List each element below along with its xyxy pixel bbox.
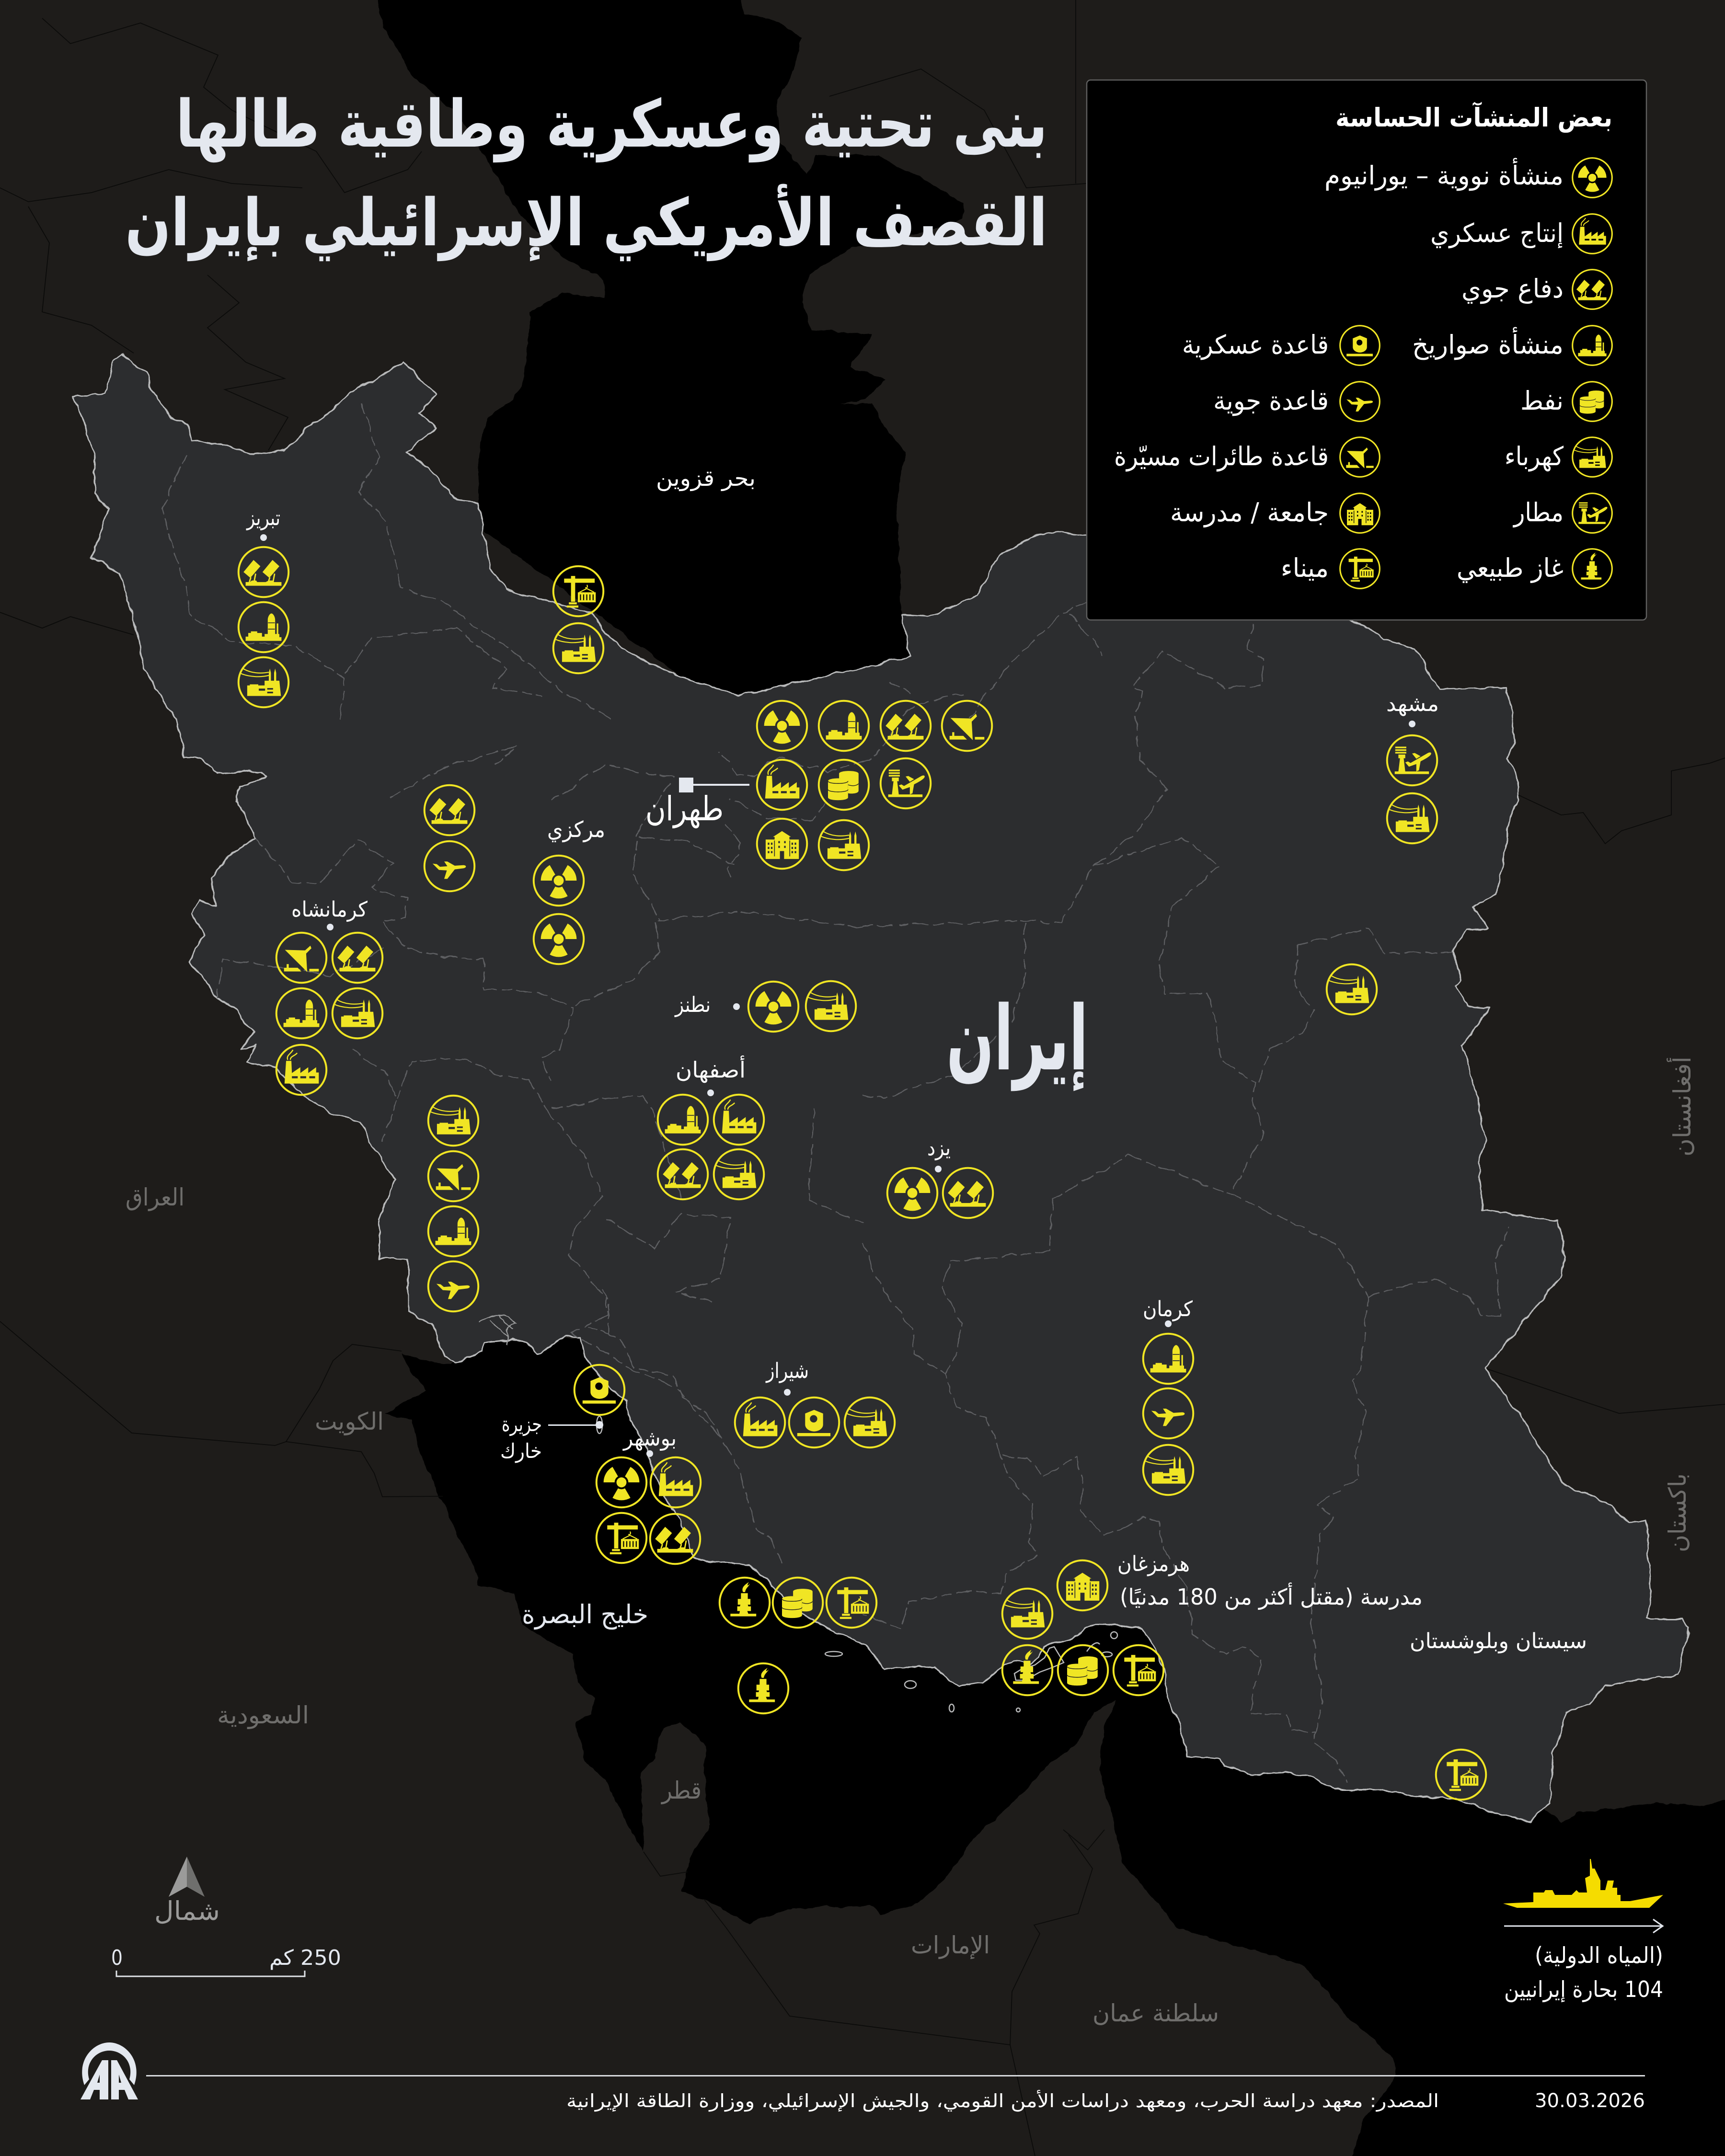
footer rule [146, 2075, 1645, 2076]
labels: neighbouring countries: باكستان [1664, 1473, 1691, 1552]
legend column: right: نفط [1520, 386, 1564, 416]
cluster: Khuzestan [428, 1096, 478, 1311]
legend column: right: دفاع جوي [1461, 274, 1564, 304]
label: Gulf of Basra: خليج البصرة [522, 1599, 648, 1630]
map: province boundaries [161, 403, 1509, 1783]
cluster: Shiraz: شيراز [765, 1359, 809, 1383]
icon: warship [1503, 1859, 1663, 1908]
legend column: right: غاز طبيعي [1457, 553, 1564, 583]
cluster: Tehran [645, 701, 992, 870]
labels: neighbouring countries: أفغانستان [1667, 1056, 1696, 1157]
legend column: left: قاعدة طائرات مسيّرة [1114, 441, 1329, 471]
legend column: left: ميناء [1281, 553, 1329, 583]
cluster: Caspian coast [553, 566, 603, 673]
legend column: left: قاعدة عسكرية [1182, 330, 1329, 360]
cluster: Tabriz [239, 506, 288, 707]
legend column: left [1114, 326, 1380, 588]
cluster: Hormozgan: مدرسة (مقتل أكثر من 180 مدنيًا) [1120, 1583, 1423, 1610]
cluster: Kerman: كرمان [1143, 1297, 1193, 1321]
scale bar: 0 [111, 1946, 123, 1970]
cluster: Bushehr [597, 1426, 701, 1564]
legend column: right: منشأة نووية – يورانيوم [1324, 158, 1564, 191]
cluster: Hormozgan [1002, 1552, 1423, 1695]
cluster: Yazd: يزد [927, 1136, 951, 1160]
legend column: right [1324, 158, 1612, 588]
cluster: Tehran: طهران [645, 789, 724, 828]
map: Caspian Sea [369, 0, 963, 719]
map: Persian Gulf and Gulf of Oman [385, 1332, 1725, 2156]
legend column: left: جامعة / مدرسة [1170, 497, 1329, 528]
labels: neighbouring countries: قطر [660, 1777, 702, 1804]
legend heading: بعض المنشآت الحساسة [1335, 102, 1612, 133]
map: Iran [74, 354, 1689, 1821]
label: international waters: (المياه الدولية) [1535, 1942, 1663, 1969]
labels: neighbouring countries: الإمارات [911, 1931, 990, 1959]
cluster: Bushehr: بوشهر [622, 1426, 677, 1451]
labels: neighbouring countries: السعودية [217, 1701, 309, 1729]
source text: المصدر: معهد دراسة الحرب، ومعهد دراسات الأمن القومي، والجيش الإسرائيلي، ووزارة الطاقة الإيرانية [566, 2089, 1439, 2112]
cluster: west of Markazi [425, 785, 474, 891]
cluster: Mashhad [1386, 692, 1439, 843]
labels: neighbouring countries: العراق [126, 1183, 184, 1211]
cluster: Natanz: نطنز [674, 993, 711, 1017]
legend column: right: مطار [1512, 497, 1564, 528]
cluster: Isfahan: أصفهان [676, 1055, 746, 1083]
cluster: Kermanshah: كرمانشاه [291, 897, 368, 922]
cluster: Yazd [887, 1136, 993, 1218]
scale bar [111, 1946, 341, 1976]
labels: neighbouring countries: سلطنة عمان [1092, 1999, 1219, 2027]
cluster: Sistan and Baluchestan: سيستان وبلوشستان [1410, 1629, 1587, 1653]
scale bar: 250 كم [269, 1946, 341, 1970]
map: islands [597, 1416, 1117, 1712]
cluster: Shiraz [735, 1359, 895, 1447]
cluster: Kerman [1143, 1297, 1193, 1495]
cluster: Natanz [674, 981, 856, 1032]
date: 30.03.2026 [1535, 2090, 1645, 2112]
legend column: right: كهرباء [1505, 441, 1564, 471]
cluster: Isfahan [658, 1055, 764, 1199]
cluster: Sistan and Baluchestan [1410, 1629, 1587, 1800]
cluster: Markazi [534, 816, 605, 964]
labels: neighbouring countries [126, 1056, 1696, 2027]
icon: north arrow [154, 1857, 220, 1926]
label: Caspian Sea: بحر قزوين [656, 465, 756, 492]
icon: electricity, South Khorasan [1327, 964, 1377, 1014]
title [125, 87, 1047, 262]
cluster: Hormozgan: هرمزغان [1117, 1552, 1190, 1576]
labels: neighbouring countries: الكويت [315, 1408, 384, 1435]
cluster: Kharg Island [500, 1365, 624, 1463]
label: international waters: 104 بحارة إيرانيين [1504, 1976, 1663, 2003]
cluster: Markazi: مركزي [547, 816, 605, 843]
label: international waters [1504, 1942, 1663, 2003]
legend column: right: منشأة صواريخ [1412, 327, 1564, 360]
cluster: Kharg Island: خارك [500, 1439, 542, 1463]
cluster: southern coast [720, 1578, 876, 1713]
cluster: Mashhad: مشهد [1386, 692, 1439, 716]
label: Iran: إيران [946, 986, 1088, 1091]
logo: AA [80, 2042, 138, 2099]
title: بنى تحتية وعسكرية وطاقية طالها [176, 87, 1047, 163]
legend column: right: إنتاج عسكري [1430, 218, 1564, 248]
icon: north arrow: شمال [154, 1896, 220, 1926]
cluster: Kharg Island: جزيرة [502, 1412, 542, 1436]
cluster: Tabriz: تبريز [246, 506, 280, 530]
legend column: left: قاعدة جوية [1213, 386, 1329, 416]
arrow: ship direction [1504, 1919, 1663, 1933]
cluster: Kermanshah [276, 897, 382, 1095]
panel: legend [1087, 80, 1646, 620]
title: القصف الأمريكي الإسرائيلي بإيران [125, 184, 1047, 262]
